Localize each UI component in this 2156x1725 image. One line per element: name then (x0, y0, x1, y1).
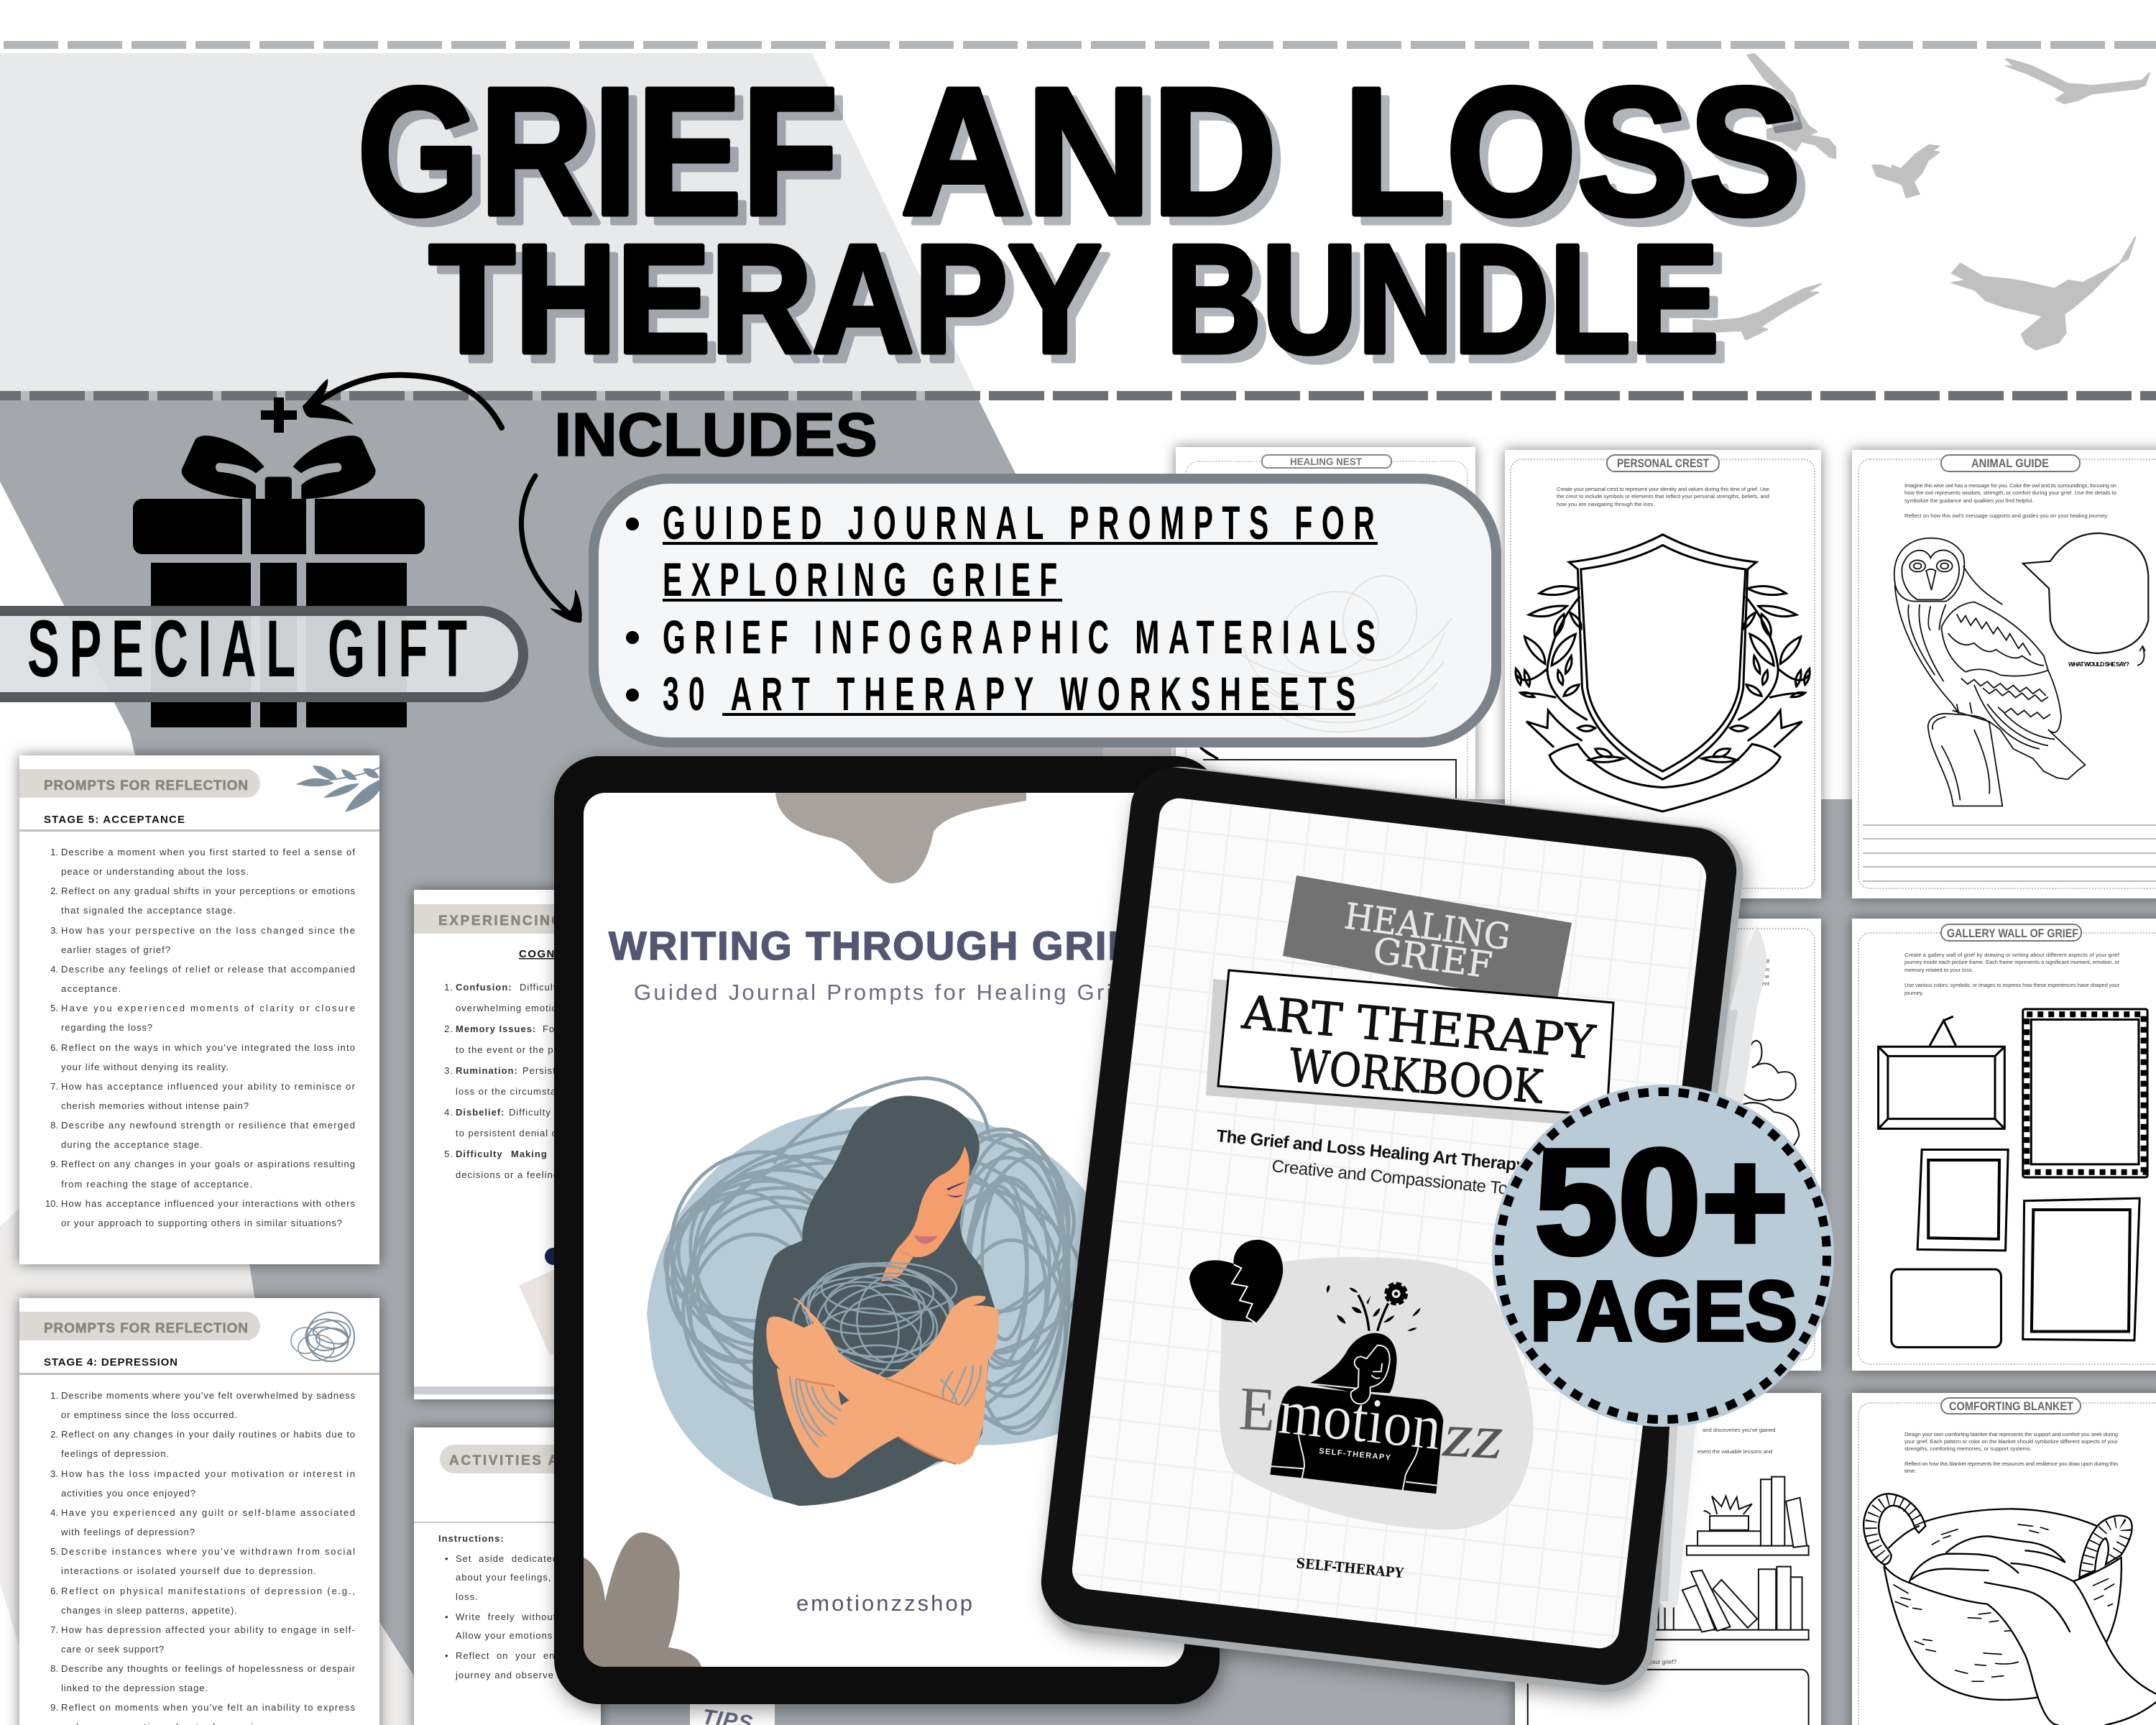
shelf instruction fragments: esent the valuable lessons and (1697, 1448, 1772, 1455)
logo figure (1270, 1284, 1443, 1494)
cognitive symptom list: to persistent denial of (456, 1128, 561, 1138)
woman face (897, 1146, 969, 1257)
cognitive symptom list: Difficulty (456, 1149, 503, 1159)
figure face outline (1351, 1346, 1390, 1404)
pencil shade (1660, 1010, 1738, 1601)
cognitive symptom list: Difficulty (509, 1107, 551, 1118)
gallery frames line art (1879, 1009, 2147, 1347)
nest card title: HEALING NEST (1290, 456, 1362, 467)
cognitive header band (414, 904, 601, 934)
stage 4 prompt list: care or seek support? (61, 1644, 164, 1655)
gallery instructions: Create a gallery wall of grief by drawing or writing about different aspects of your grief (1904, 952, 2120, 958)
owl instructions: symbolize the guidance and qualities you find helpful. (1904, 497, 2033, 504)
shelf instruction fragments: and discoveries you've gained (1703, 1427, 1775, 1433)
stage 5 prompt list: 10. (45, 1198, 58, 1209)
icon: scribble (291, 1312, 354, 1363)
blanket instructions: Reflect on how this blanket represents the resources and resilience you draw upon during this (1904, 1460, 2118, 1467)
woman lips (914, 1235, 938, 1243)
gallery instructions: Use various colors, symbols, or images to express how these experiences have shaped your (1904, 982, 2119, 988)
icon: gift box (133, 397, 425, 727)
stage 5 prompt list: Describe any newfound strength or resilience that emerged (61, 1120, 355, 1131)
tree instruction fragments: t the (1759, 973, 1769, 980)
stage 4 prompt list: Reflect on any changes in your daily routines or habits due to (61, 1429, 355, 1440)
stage 5 prompt list: peace or understanding about the loss. (61, 866, 249, 877)
shelf sheet (1515, 1393, 1821, 1725)
owl instructions: Imagine this wise owl has a message for you. Color the owl and its surroundings, focusing on (1904, 482, 2116, 489)
activities instructions: Set aside dedicated (456, 1553, 558, 1564)
stage 4 prompt list: 8. (50, 1663, 58, 1674)
gallery dotted border (1858, 933, 2156, 1364)
cognitive symptom list: Rumination: (456, 1065, 518, 1076)
activities instructions: about your feelings, (456, 1572, 551, 1583)
arm shading (796, 1379, 959, 1464)
list underlines (663, 543, 1378, 714)
activities instructions (438, 1533, 568, 1680)
stage 5 prompt list: 8. (50, 1120, 58, 1131)
cognitive symptom list: Memory Issues: (456, 1024, 536, 1034)
cognitive symptom list: decisions or a feeling (456, 1169, 559, 1180)
stage 5 prompt list: your life without denying its reality. (61, 1062, 229, 1072)
stage 5 prompt list: Reflect on any changes in your goals or aspirations resulting (61, 1159, 355, 1169)
workbook subtitle bold: The Grief and Loss Healing Art Therapy (1215, 1126, 1527, 1175)
figure head (545, 1248, 562, 1265)
stage 4 prompt list: 2. (50, 1429, 58, 1440)
shop name: emotionzzshop (796, 1591, 972, 1616)
title text: AND (900, 50, 1277, 253)
stage 5 prompt list: 7. (50, 1081, 58, 1092)
cognitive footer stripe (414, 1386, 601, 1394)
blanket title pill (1941, 1398, 2081, 1414)
pill shape (0, 611, 523, 697)
top dashed line (4, 41, 2156, 49)
blanket instructions (1904, 1431, 2118, 1474)
tablet two body (1036, 761, 1749, 1698)
middle dashed line (0, 391, 2156, 400)
tree sheet (1505, 919, 1821, 1371)
crest instructions: how you are navigating through the loss. (1557, 501, 1654, 507)
stage 4 prompt list: feelings of depression. (61, 1448, 169, 1459)
nest small bird (1200, 748, 1218, 759)
shelf instruction fragments (1649, 1427, 1775, 1665)
stage 5 prompt list: How has acceptance influenced your ability to reminisce or (61, 1081, 356, 1092)
title shadow: AND (909, 58, 1286, 262)
stage 5 prompt list: cherish memories without intense pain? (61, 1100, 249, 1111)
logo wordmark: zz (1441, 1400, 1505, 1473)
stage 5 prompt list: How has your perspective on the loss changed since the (61, 925, 355, 936)
stage 4 prompt list: How has depression affected your ability to engage in self- (61, 1624, 355, 1635)
title shadow: LOSS (1352, 58, 1810, 262)
woman hair and dress (752, 1096, 995, 1506)
tree instruction fragments (1757, 958, 1770, 987)
stage 4 prompt list (50, 1390, 356, 1725)
nest card dotted border (1186, 461, 1468, 806)
stage 5 prompt list: 3. (50, 925, 58, 936)
tablet one bezel (554, 756, 1220, 1704)
panel: tips card peeking under tablet (690, 1696, 775, 1725)
inner scribble (788, 1246, 975, 1395)
stage 5 prompt list: 9. (50, 1159, 58, 1169)
woman arm underneath (777, 1296, 998, 1478)
woman eyes (946, 1182, 966, 1197)
gallery instructions: memory related to your loss. (1904, 967, 1973, 973)
cognitive symptom list: Confusion: (456, 982, 512, 993)
cognitive header: EXPERIENCING (438, 914, 564, 929)
crest instructions: the crest to include symbols or elements that reflect your personal strengths, beliefs, and (1557, 493, 1769, 500)
tree clouds line art (1743, 1041, 1799, 1156)
healing grief text: GRIEF (1370, 929, 1495, 987)
activities instructions: Reflect on your entry (456, 1650, 568, 1661)
stage 4 prompt list: 7. (50, 1624, 58, 1635)
cognitive symptom list: Forgetting (543, 1024, 592, 1034)
stage 4 header band (19, 1312, 260, 1340)
cognitive symptom list: Disbelief: (456, 1107, 505, 1118)
figure head and hair (1309, 1333, 1397, 1400)
plus sign (261, 397, 297, 433)
cognitive symptom list (444, 982, 592, 1180)
crest line art (1516, 535, 1810, 811)
background: pale title band (0, 53, 976, 392)
title (357, 50, 1810, 394)
stage 4 prompt list: interactions or isolated yourself due to depression. (61, 1565, 316, 1576)
arrow to list (521, 476, 582, 622)
logo tagline: SELF-THERAPY (1319, 1447, 1391, 1463)
stage 5 header: PROMPTS FOR REFLECTION (44, 778, 248, 794)
stage 4 prompt list: 9. (50, 1702, 58, 1713)
cognitive subheader: COGNITIVE (519, 948, 588, 960)
panel: animal guide worksheet (1852, 450, 2156, 898)
list items: 30 ART THERAPY WORKSHEETS (663, 667, 1355, 720)
art therapy workbook text (1240, 986, 1598, 1115)
activities header: ACTIVITIES AND (449, 1453, 584, 1468)
activities instructions: • (445, 1650, 449, 1661)
logo wordmark: motion (1276, 1376, 1445, 1464)
tree instruction fragments: erent (1757, 980, 1770, 987)
stage 5 prompt list: 1. (50, 847, 58, 857)
owl writing lines (1863, 825, 2156, 881)
icon: leaf branch (297, 765, 379, 812)
gallery instructions: journey. (1904, 990, 1923, 996)
stage 5 prompt list: acceptance. (61, 983, 121, 994)
background: light patch lower left (0, 1186, 431, 1725)
cognitive symptom list: 2. (444, 1024, 453, 1034)
panel: prompts stage 5 acceptance (19, 755, 379, 1264)
gallery instructions (1904, 952, 2120, 996)
figure body lines (1271, 1384, 1437, 1490)
stage 5 prompt list: 4. (50, 964, 58, 975)
blanket title: COMFORTING BLANKET (1949, 1399, 2074, 1413)
stage 4 rule (19, 1373, 379, 1375)
panel: healing nest worksheet (1176, 447, 1475, 806)
stage 5 prompt list: 6. (50, 1042, 58, 1053)
blanket instructions: Design your own comforting blanket that represents the support and comfort you seek during (1904, 1431, 2118, 1438)
badge disc (1492, 1085, 1834, 1427)
stage 5 prompt list: regarding the loss? (61, 1022, 152, 1033)
list items: GUIDED JOURNAL PROMPTS FOR (663, 496, 1375, 549)
cognitive symptom list: 4. (444, 1107, 453, 1118)
apple pencil (1660, 926, 1766, 1609)
badge: 50+ pages (1492, 1085, 1834, 1427)
tree instruction fragments: self (1761, 958, 1770, 965)
stage 4 prompt list: Reflect on physical manifestations of depression (e.g., (61, 1586, 355, 1596)
stage 4 header: PROMPTS FOR REFLECTION (44, 1321, 248, 1336)
cognitive symptom list: 1. (444, 982, 453, 993)
title shadow (366, 58, 1810, 394)
stage 5 prompt list: Reflect on the ways in which you've integrated the loss into (61, 1042, 355, 1053)
title shadow: GRIEF (366, 58, 847, 262)
tablet one button (1103, 748, 1171, 758)
panel: prompts stage 4 depression (19, 1298, 379, 1725)
stage 5 prompt list: Have you experienced moments of clarity or closure (61, 1003, 355, 1013)
crest title: PERSONAL CREST (1617, 456, 1709, 470)
shelf instruction fragments: your grief? (1649, 1659, 1677, 1665)
nest drawing showing through pill (1236, 566, 1452, 732)
shelf line art (1528, 1477, 1809, 1725)
nest faded text lines (1222, 487, 1437, 505)
stage 5 rule (19, 829, 379, 832)
owl instructions: how the owl represents wisdom, strength, or comfort during your grief. Use the details to (1904, 489, 2116, 496)
gallery instructions: journey inside each picture frame. Each frame represents a significant moment, emotion, or (1904, 959, 2119, 965)
owl sheet (1852, 450, 2156, 898)
stage 5 prompt list (45, 847, 356, 1228)
list pill outline (594, 479, 1496, 742)
stage 5 sheet (19, 755, 379, 1264)
list pill (594, 479, 1496, 742)
stage 5 prompt list: Describe a moment when you first started to feel a sense of (61, 847, 355, 857)
gallery title pill (1941, 924, 2081, 941)
panel: experiencing cognitive symptoms (414, 890, 601, 1399)
blanket instructions: strengths, comforting memories, or support systems. (1904, 1445, 2032, 1452)
healing grief text: HEALING (1342, 895, 1513, 958)
stage 4 prompt list: Describe any thoughts or feelings of hopelessness or despair (61, 1663, 356, 1674)
activities instructions: loss. (456, 1591, 479, 1602)
stage 4 prompt list: Have you experienced any guilt or self-blame associated (61, 1507, 355, 1518)
logo wordmark: E (1238, 1374, 1277, 1445)
list items: GRIEF INFOGRAPHIC MATERIALS (663, 610, 1376, 663)
figure body (519, 1269, 568, 1355)
blanket basket line art (1864, 1494, 2156, 1725)
stage 5 prompt list: 2. (50, 886, 58, 896)
healing grief text (1342, 895, 1513, 987)
activities instructions: journey and observe (455, 1670, 554, 1680)
stage 5 prompt list: Reflect on any gradual shifts in your perceptions or emotions (61, 886, 356, 896)
activities instructions: Write freely without (456, 1611, 556, 1622)
badge number: 50+ (1534, 1118, 1789, 1286)
nest card sheet (1176, 447, 1475, 799)
gallery title: GALLERY WALL OF GRIEF (1947, 926, 2078, 940)
stage 4 prompt list: 5. (50, 1546, 58, 1557)
healing grief banner (1283, 875, 1572, 1006)
woman crossed forearm on top (766, 1298, 983, 1463)
tangled strands on arms (790, 1365, 981, 1448)
heart shape (1189, 1240, 1283, 1322)
tablet two: art therapy workbook (1036, 761, 1749, 1698)
stage 4 prompt list: Describe instances where you've withdrawn from social (61, 1546, 355, 1557)
activities sheet (414, 1427, 601, 1725)
activities instructions: Allow your emotions (456, 1630, 553, 1641)
title text (357, 50, 1801, 385)
cognitive symptom list: 3. (444, 1065, 453, 1076)
stage 4 prompt list: Describe moments where you've felt overwhelmed by sadness (61, 1390, 355, 1401)
owl line art (1894, 533, 2148, 806)
outer scribble loops (645, 1078, 1092, 1442)
blanket instructions: time. (1904, 1468, 1916, 1474)
nest bottom box (1203, 760, 1456, 805)
blanket dotted border (1858, 1403, 2156, 1725)
screen title: WRITING THROUGH GRIEF (609, 923, 1161, 968)
tablet one: writing through grief (554, 748, 1220, 1704)
list items (663, 496, 1376, 720)
cognitive sheet (414, 890, 601, 1399)
stage 4 sheet (19, 1298, 379, 1725)
owl caption: WHAT WOULD SHE SAY? (2068, 661, 2129, 668)
activities instructions: • (445, 1553, 449, 1564)
pill label: SPECIAL GIFT (27, 603, 467, 694)
stage 5 prompt list: during the acceptance stage. (61, 1139, 203, 1150)
art therapy box (1218, 970, 1613, 1116)
workbook subtitle regular: Creative and Compassionate To (1271, 1156, 1508, 1199)
activities rule (414, 1522, 601, 1523)
background: grey main shape (0, 395, 2156, 1725)
stage 4 prompt list: 4. (50, 1507, 58, 1518)
owl instructions: Reflect on how this owl's message supports and guides you on your healing journey. (1904, 512, 2108, 519)
gift bow (182, 436, 376, 501)
activities header pill (440, 1445, 601, 1473)
owl instructions (1904, 482, 2116, 519)
list bullets (626, 518, 639, 702)
cognitive illustration (519, 1248, 568, 1355)
badge label: PAGES (1530, 1264, 1797, 1359)
gift body (151, 563, 407, 727)
cognitive symptom list: Making (511, 1149, 548, 1159)
title shadow: BUNDLE (1174, 221, 1728, 394)
screen corner blob (584, 1532, 701, 1667)
cognitive symptom list: 5. (444, 1149, 453, 1159)
cognitive symptom list: Difficulty (520, 982, 562, 993)
blanket sheet (1852, 1393, 2156, 1725)
art therapy box shadow (1206, 979, 1610, 1127)
gift lid (133, 499, 425, 554)
scribble backdrop (647, 1105, 1095, 1499)
stage 4 prompt list: 3. (50, 1468, 58, 1479)
tree instruction fragments: this (1761, 966, 1769, 972)
badge dashed ring (1499, 1092, 1827, 1420)
stage 4 prompt list: Reflect on moments when you've felt an inability to express (61, 1702, 355, 1713)
activities instructions: • (445, 1611, 449, 1622)
tablet two screen with grid (1070, 796, 1708, 1650)
stage 5 prompt list: earlier stages of grief? (61, 944, 170, 955)
stage 4 prompt list: or emptiness since the loss occurred. (61, 1409, 237, 1420)
includes heading: INCLUDES (554, 401, 877, 469)
nest card title pill (1262, 455, 1391, 468)
tips sheet (690, 1696, 775, 1725)
screen subtitle: Guided Journal Prompts for Healing Grief (634, 980, 1135, 1005)
workbook footer: SELF-THERAPY (1296, 1555, 1404, 1581)
blanket instructions: your grief. Each pattern or color on the blanket should symbolize different aspects of your (1904, 1438, 2118, 1445)
stage 4 subheader: STAGE 4: DEPRESSION (44, 1356, 178, 1368)
flower and sprigs (1327, 1284, 1421, 1331)
title text: LOSS (1343, 50, 1801, 253)
stage 4 prompt list: 6. (50, 1586, 58, 1596)
art therapy workbook text: WORKBOOK (1287, 1039, 1546, 1115)
owl title pill (1941, 455, 2080, 472)
title text: THERAPY (429, 212, 1102, 385)
stage 4 prompt list: 1. (50, 1390, 58, 1401)
stage 5 prompt list: 5. (50, 1003, 58, 1013)
owl title: ANIMAL GUIDE (1971, 456, 2049, 470)
panel: activities and journaling (414, 1427, 601, 1725)
icon: broken heart (1189, 1240, 1283, 1322)
crest sheet (1505, 450, 1821, 898)
title text: GRIEF (357, 50, 838, 253)
stage 5 prompt list: from reaching the stage of acceptance. (61, 1179, 252, 1190)
logo blob (1219, 1257, 1534, 1530)
special gift pill (0, 603, 523, 697)
panel: comforting blanket worksheet (1852, 1393, 2156, 1725)
stage 5 prompt list: Describe any feelings of relief or release that accompanied (61, 964, 355, 975)
title text: BUNDLE (1166, 212, 1719, 385)
tablet two bezel (1036, 763, 1741, 1690)
crest title pill (1607, 455, 1719, 472)
list items: EXPLORING GRIEF (663, 553, 1057, 606)
cognitive symptom list: overwhelming emotions (456, 1003, 569, 1013)
crest dotted border (1511, 459, 1815, 888)
art therapy workbook text: ART THERAPY (1240, 986, 1598, 1070)
stage 4 prompt list: with feelings of depression? (60, 1527, 195, 1537)
pencil body (1660, 926, 1766, 1609)
illustration: woman with scribble (645, 1078, 1095, 1506)
logo wordmark (1238, 1374, 1505, 1473)
panel: sky tree worksheet (1505, 919, 1821, 1371)
woman neck (881, 1248, 913, 1282)
stage 5 subheader: STAGE 5: ACCEPTANCE (44, 814, 185, 826)
panel: gallery wall of grief worksheet (1852, 919, 2156, 1371)
stage 4 prompt list: activities you once enjoyed? (61, 1488, 195, 1499)
screen top blob (775, 793, 1026, 883)
crest instructions: Create your personal crest to represent your identity and values during this time of grief. Use (1557, 486, 1769, 492)
cognitive symptom list: Persistent (522, 1065, 571, 1076)
heart crack (1232, 1264, 1256, 1322)
crest instructions (1557, 486, 1769, 507)
title shadow: THERAPY (438, 221, 1110, 394)
middle dash underlay (0, 391, 976, 400)
woman upper arm right (921, 1358, 989, 1465)
panel: bookshelf worksheet (1515, 1393, 1821, 1725)
tablet two silver edge (1038, 762, 1749, 1698)
tablet one screen (584, 793, 1184, 1667)
figure body (1270, 1386, 1443, 1494)
stage 5 header band (19, 769, 260, 798)
stage 5 prompt list: or your approach to supporting others in similar situations? (61, 1218, 342, 1228)
tree dotted border (1511, 929, 1815, 1360)
activities instructions: Instructions: (438, 1533, 505, 1544)
birds silhouettes (1693, 54, 2150, 350)
stage 4 prompt list: changes in sleep patterns, appetite). (61, 1605, 237, 1616)
cognitive symptom list: loss or the circumstances (456, 1086, 579, 1097)
owl dotted border (1858, 459, 2156, 888)
stage 4 prompt list: linked to the depression stage. (61, 1683, 208, 1693)
arrow to gift (303, 375, 502, 428)
cognitive symptom list: to the event or the past (456, 1044, 568, 1055)
stage 4 prompt list: How has the loss impacted your motivation or interest in (61, 1468, 355, 1479)
stage 5 prompt list: that signaled the acceptance stage. (61, 905, 236, 916)
gallery sheet (1852, 919, 2156, 1371)
panel: personal crest worksheet (1505, 450, 1821, 898)
stage 5 prompt list: How has acceptance influenced your interactions with others (61, 1198, 356, 1209)
